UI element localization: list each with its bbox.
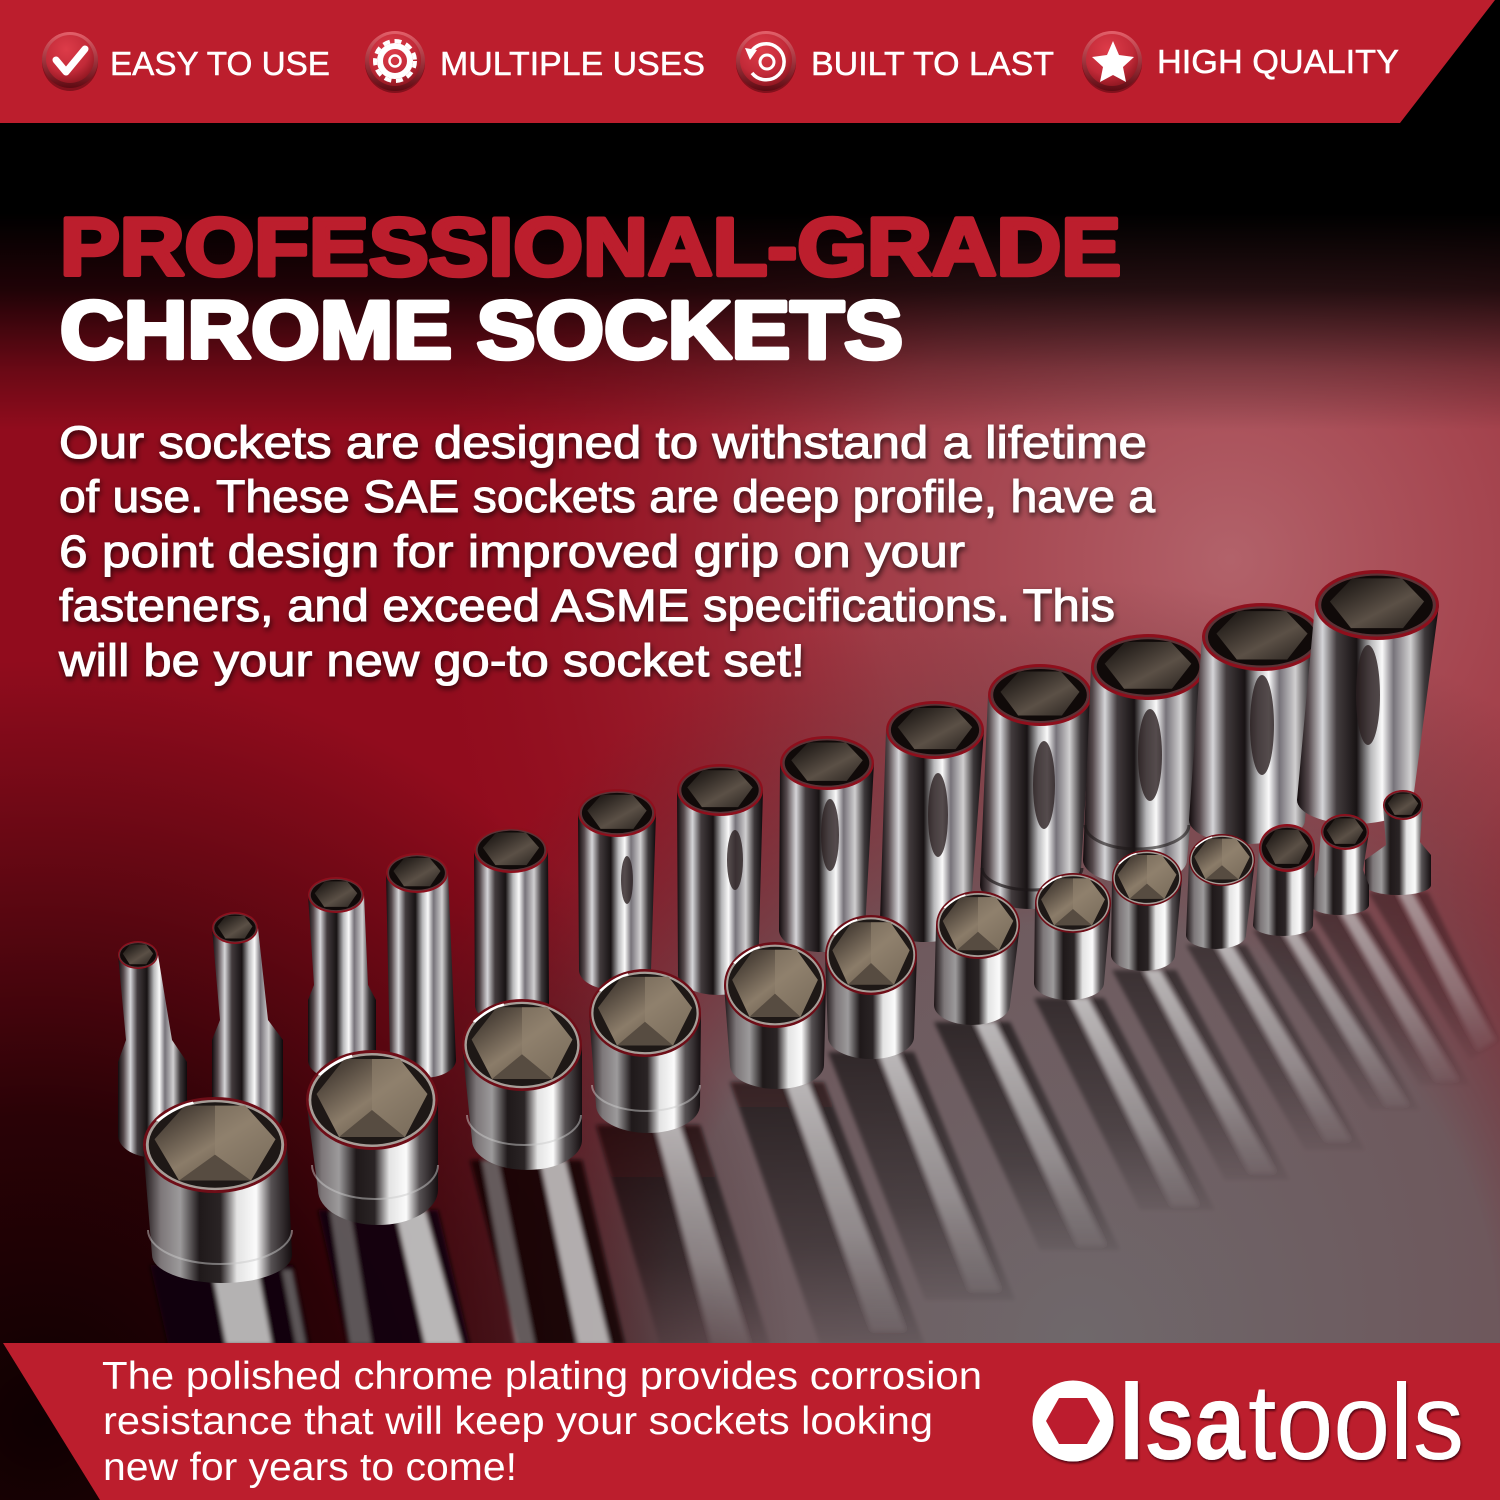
shallow socket 13: [1365, 790, 1431, 895]
deep socket 2: [212, 912, 283, 1136]
deep socket 6: [578, 789, 656, 990]
logo: Olsatools: lsa: [1119, 1361, 1246, 1482]
body text: will be your new go-to socket set!: [58, 635, 805, 686]
front row: shallow sockets: [143, 790, 1431, 1283]
label: MULTIPLE USES: [440, 45, 705, 82]
deep socket 11: [1083, 634, 1205, 884]
shallow socket 4: [589, 969, 701, 1133]
shallow socket 5: [724, 942, 826, 1089]
label: HIGH QUALITY: [1157, 43, 1399, 80]
floor reflections of the sockets: [150, 892, 1500, 1345]
title: PROFESSIONAL-GRADE: [60, 202, 1121, 293]
shallow socket 7: [934, 891, 1020, 1025]
deep socket 3: [308, 877, 376, 1080]
bottom banner: [3, 1343, 1500, 1500]
feature: high quality: [1082, 31, 1399, 93]
shallow socket 11: [1253, 824, 1315, 936]
deep socket 1: [118, 941, 187, 1157]
deep socket 4: [386, 853, 456, 1078]
body text: of use. These SAE sockets are deep profile, have a: [59, 471, 1156, 522]
body text: fasteners, and exceed ASME specifications. This: [59, 580, 1115, 631]
deep socket 7: [677, 764, 763, 995]
label: EASY TO USE: [110, 45, 330, 82]
footer text: resistance that will keep your sockets looking: [103, 1400, 933, 1443]
shallow socket 2: [306, 1050, 438, 1225]
body text: Our sockets are designed to withstand a lifetime: [59, 417, 1147, 468]
icon: star badge: [1082, 31, 1142, 93]
deep socket 12: [1189, 603, 1322, 844]
icon: check mark badge: [42, 32, 98, 91]
footer text: [102, 1355, 982, 1489]
logo: Olsatools: [1032, 1360, 1464, 1483]
label: BUILT TO LAST: [811, 45, 1054, 82]
footer text: The polished chrome plating provides corrosion: [102, 1355, 982, 1398]
shallow socket 1: [143, 1097, 292, 1283]
feature: easy to use: [42, 32, 330, 91]
shallow socket 10: [1186, 834, 1255, 949]
shallow socket 3: [462, 999, 582, 1170]
deep socket 9: [880, 701, 984, 942]
shallow socket 12: [1311, 814, 1369, 915]
deep socket 10: [980, 664, 1092, 909]
logo: Olsatools: O: [1033, 1360, 1113, 1483]
footer text: new for years to come!: [103, 1446, 517, 1489]
title: CHROME SOCKETS: [60, 285, 903, 376]
body text: 6 point design for improved grip on your: [59, 526, 965, 577]
logo: Olsatools: tools: [1248, 1361, 1464, 1482]
deep socket 8: [779, 736, 874, 952]
feature: multiple uses: [365, 31, 705, 93]
deep socket 13: [1297, 570, 1439, 824]
deep socket 5: [474, 827, 549, 1025]
icon: gear badge: [365, 31, 425, 93]
back row: deep sockets: [118, 570, 1439, 1157]
icon: cycle gear badge: [736, 31, 796, 93]
title: [60, 202, 1121, 376]
shallow socket 6: [825, 915, 917, 1059]
top banner: [0, 0, 1495, 123]
shallow socket 9: [1111, 850, 1182, 971]
body text: [58, 417, 1156, 686]
shallow socket 8: [1034, 873, 1111, 1000]
feature: built to last: [736, 31, 1054, 93]
